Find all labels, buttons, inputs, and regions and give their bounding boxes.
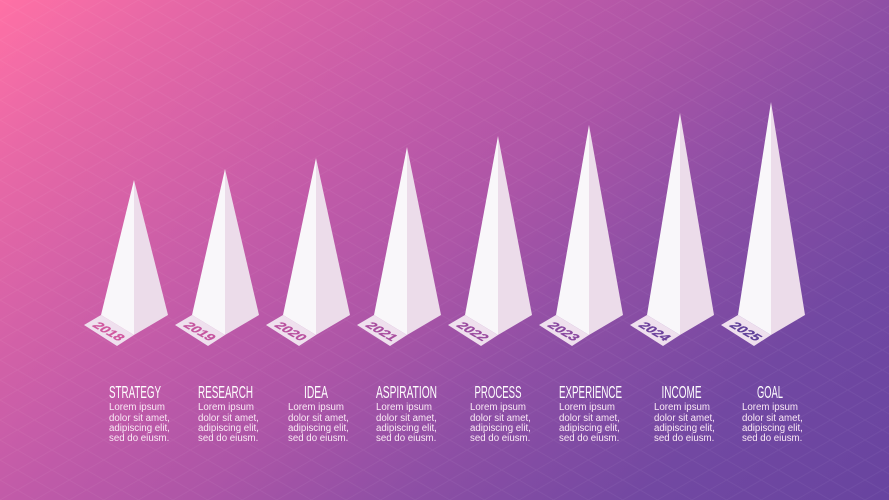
pyramid: 2021 [357, 147, 441, 346]
text block: idea: sed do eiusm. [288, 433, 348, 444]
text block: research: sed do eiusm. [198, 433, 258, 444]
text block: process: adipiscing elit, [470, 423, 531, 434]
text block: goal: sed do eiusm. [742, 433, 802, 444]
text block: goal [742, 382, 803, 444]
text block: research: Lorem ipsum [198, 402, 254, 413]
pyramid: 2024 [630, 113, 714, 346]
text block: aspiration: Lorem ipsum [376, 402, 432, 413]
text block: aspiration: dolor sit amet, [376, 413, 437, 424]
text block: aspiration: adipiscing elit, [376, 423, 437, 434]
text block: strategy [109, 382, 170, 444]
text block: idea: adipiscing elit, [288, 423, 349, 434]
text block: experience: adipiscing elit, [559, 423, 620, 434]
text block: idea: dolor sit amet, [288, 413, 349, 424]
text block: goal: GOAL [757, 382, 783, 402]
text block: aspiration: ASPIRATION [376, 382, 437, 402]
text block: income: dolor sit amet, [654, 413, 715, 424]
pyramid: 2020: 2020 [271, 320, 311, 343]
text block: strategy: adipiscing elit, [109, 423, 170, 434]
text block: process: PROCESS [474, 382, 522, 402]
pyramid: 2022 [448, 136, 532, 346]
pyramid: 2018: 2018 [89, 320, 129, 343]
text block: income: Lorem ipsum [654, 402, 710, 413]
text block: process: sed do eiusm. [470, 433, 530, 444]
text block: experience [559, 382, 622, 444]
text block: income [654, 382, 715, 444]
text block: goal: adipiscing elit, [742, 423, 803, 434]
text block: idea: Lorem ipsum [288, 402, 344, 413]
pyramid: 2023 [539, 125, 623, 346]
pyramid: 2020 [266, 158, 350, 346]
text block: income: sed do eiusm. [654, 433, 714, 444]
text block: income: adipiscing elit, [654, 423, 715, 434]
text block: process [470, 382, 531, 444]
text block: experience: EXPERIENCE [559, 382, 622, 402]
text block: research: adipiscing elit, [198, 423, 259, 434]
text block: aspiration: sed do eiusm. [376, 433, 436, 444]
text block: process: Lorem ipsum [470, 402, 526, 413]
text block: process: dolor sit amet, [470, 413, 531, 424]
text block: research: RESEARCH [198, 382, 253, 402]
text block: research [198, 382, 259, 444]
pyramid: 2019 [175, 169, 259, 346]
pyramid: 2018 [84, 180, 168, 346]
text block: research: dolor sit amet, [198, 413, 259, 424]
pyramid: 2023: 2023 [544, 320, 584, 343]
text block: strategy: STRATEGY [109, 382, 161, 402]
text block: experience: sed do eiusm. [559, 433, 619, 444]
pyramid: 2019: 2019 [180, 320, 220, 343]
text block: experience: Lorem ipsum [559, 402, 615, 413]
pyramid: 2025: 2025 [726, 320, 766, 343]
text block: income: INCOME [662, 382, 702, 402]
text block: strategy: sed do eiusm. [109, 433, 169, 444]
pyramid: 2022: 2022 [453, 320, 493, 343]
pyramid: 2025 [721, 102, 805, 346]
text block: goal: dolor sit amet, [742, 413, 803, 424]
text block: strategy: dolor sit amet, [109, 413, 170, 424]
text block: idea: IDEA [304, 382, 328, 402]
pyramid: 2024: 2024 [635, 320, 676, 343]
text block: idea [288, 382, 349, 444]
text block: aspiration [376, 382, 437, 444]
text block: strategy: Lorem ipsum [109, 402, 165, 413]
text block: experience: dolor sit amet, [559, 413, 620, 424]
text block: goal: Lorem ipsum [742, 402, 798, 413]
pyramid: 2021: 2021 [362, 320, 402, 343]
